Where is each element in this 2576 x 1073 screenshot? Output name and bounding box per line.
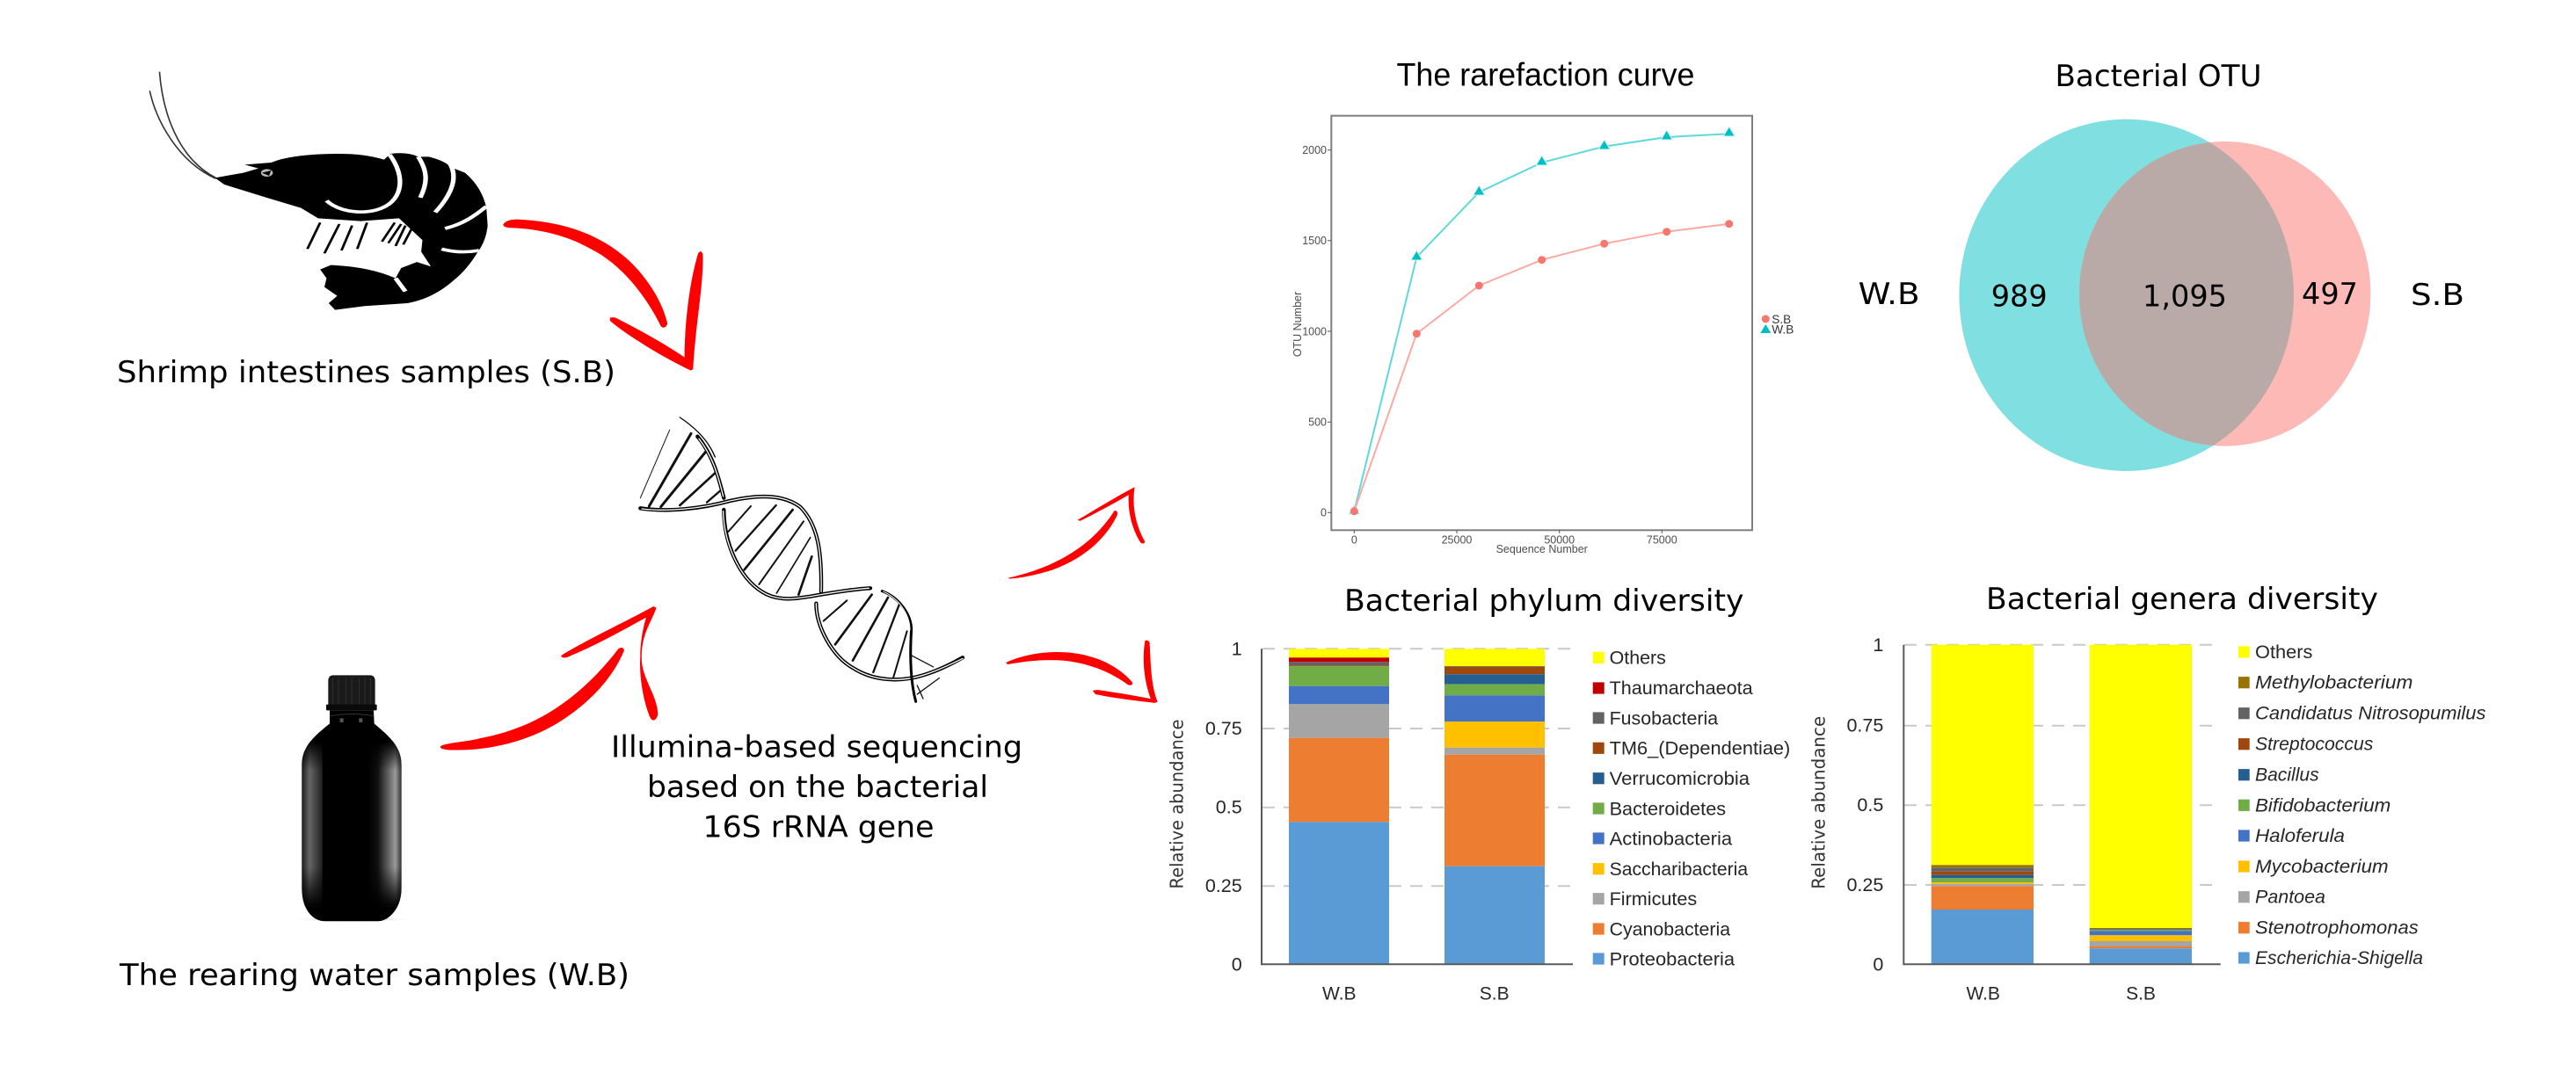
- legend: phylum: TM6_(Dependentiae): [1610, 739, 1790, 759]
- text: sequencing description: [611, 730, 1022, 845]
- heading: bacterial OTU: Bacterial OTU: [2056, 59, 2261, 94]
- legend: phylum: Bacteroidetes: [1610, 799, 1726, 819]
- legend: phylum: [1593, 649, 1790, 969]
- venn diagram: 989: [1991, 279, 2048, 313]
- stacked bar chart: phylum: 0.25: [1205, 875, 1242, 896]
- text: sequencing description: 16S rRNA gene: [703, 810, 934, 845]
- plot frame and axes: [1292, 116, 1752, 555]
- legend: genera: Bifidobacterium: [2255, 795, 2390, 816]
- stacked bar chart: genera: 0.5: [1857, 794, 1883, 816]
- label: water samples: The rearing water samples (W.B): [119, 958, 629, 993]
- legend: phylum: Thaumarchaeota: [1610, 678, 1753, 699]
- legend: genera: Haloferula: [2255, 826, 2345, 846]
- legend: rarefaction series: [1760, 312, 1794, 336]
- plot frame and axes: 1000: [1302, 325, 1327, 337]
- plot frame and axes: 1500: [1302, 235, 1327, 247]
- stacked bar chart: genera: 0.25: [1846, 874, 1883, 895]
- plot frame and axes: 500: [1308, 417, 1327, 429]
- legend: genera: Others: [2255, 642, 2312, 663]
- legend: phylum: Cyanobacteria: [1610, 919, 1730, 939]
- text: sequencing description: Illumina-based sequencing: [611, 730, 1022, 765]
- plot frame and axes: 2000: [1302, 144, 1327, 156]
- plot frame and axes: 25000: [1442, 533, 1472, 546]
- icon: water bottle: [302, 675, 402, 921]
- stacked bar chart: phylum: 0.5: [1216, 797, 1242, 818]
- arrow: water to sequencing: [440, 606, 658, 750]
- line series: S.B: [1350, 220, 1733, 515]
- label: shrimp samples: Shrimp intestines samples (S.B): [117, 355, 615, 390]
- legend: phylum: Saccharibacteria: [1610, 859, 1748, 880]
- stacked bar chart: phylum: Relative abundance: [1167, 719, 1188, 889]
- plot frame and axes: OTU Number: [1292, 292, 1304, 357]
- stacked bar chart: phylum: 0: [1232, 953, 1242, 975]
- plot frame and axes: 50000: [1544, 533, 1575, 546]
- stacked bar chart: phylum: S.B: [1480, 983, 1510, 1004]
- heading: genera diversity: Bacterial genera diversity: [1986, 582, 2378, 617]
- legend: phylum: Proteobacteria: [1610, 949, 1735, 969]
- legend: genera: Streptococcus: [2255, 735, 2374, 755]
- legend: rarefaction series: S.B: [1772, 312, 1791, 326]
- legend: genera: Pantoea: [2255, 888, 2325, 908]
- label: W.B set: W.B: [1859, 277, 1920, 312]
- legend: genera: Escherichia-Shigella: [2255, 948, 2423, 968]
- panel: rarefaction curve: [1292, 56, 1794, 555]
- arrow: shrimp to sequencing: [503, 220, 702, 371]
- heading: rarefaction curve: The rarefaction curve: [1396, 56, 1695, 92]
- stacked bar chart: genera: 0: [1873, 953, 1883, 975]
- stacked bar chart: genera: W.B: [1966, 983, 2000, 1004]
- line series: W.B: [1349, 127, 1735, 514]
- arrow: sequencing to diversity charts: [1006, 641, 1158, 703]
- legend: genera: Stenotrophomonas: [2255, 918, 2419, 939]
- panel: bacterial phylum diversity: [1167, 584, 1790, 1004]
- stacked bar chart: genera: Relative abundance: [1808, 716, 1830, 889]
- legend: genera: Bacillus: [2255, 765, 2319, 786]
- legend: phylum: Fusobacteria: [1610, 708, 1718, 729]
- legend: genera: Methylobacterium: [2255, 673, 2412, 693]
- legend: genera: Mycobacterium: [2255, 857, 2389, 877]
- stacked bar chart: phylum: [1167, 639, 1573, 1004]
- stacked bar chart: genera: [1808, 634, 2221, 1004]
- panel: bacterial genera diversity: [1808, 582, 2486, 1004]
- legend: phylum: Firmicutes: [1610, 889, 1697, 910]
- stacked bar chart: genera: S.B: [2126, 983, 2156, 1004]
- plot frame and axes: Sequence Number: [1496, 543, 1588, 555]
- stacked bar chart: genera: 0.75: [1846, 715, 1883, 736]
- legend: genera: Candidatus Nitrosopumilus: [2255, 704, 2486, 724]
- legend: genera: [2238, 642, 2486, 968]
- legend: phylum: Actinobacteria: [1610, 829, 1732, 849]
- plot frame and axes: 75000: [1647, 533, 1677, 546]
- stacked bar chart: phylum: 1: [1232, 639, 1242, 660]
- venn diagram: 1,095: [2143, 279, 2227, 313]
- icon: DNA double helix: [640, 417, 963, 701]
- text: sequencing description: based on the bacterial: [647, 770, 988, 805]
- legend: phylum: Others: [1610, 649, 1666, 669]
- legend: rarefaction series: W.B: [1772, 322, 1794, 336]
- panel: bacterial OTU venn: [1859, 59, 2464, 471]
- plot frame and axes: 0: [1351, 533, 1357, 546]
- stacked bar chart: phylum: 0.75: [1205, 718, 1242, 739]
- icon: shrimp: [149, 72, 488, 310]
- heading: phylum diversity: Bacterial phylum diversity: [1344, 584, 1744, 619]
- stacked bar chart: phylum: W.B: [1322, 983, 1357, 1004]
- label: S.B set: S.B: [2411, 278, 2464, 313]
- venn diagram: [1959, 120, 2370, 471]
- stacked bar chart: genera: 1: [1873, 634, 1883, 656]
- plot frame and axes: 0: [1321, 506, 1327, 518]
- legend: phylum: Verrucomicrobia: [1610, 769, 1750, 789]
- venn diagram: 497: [2302, 277, 2358, 311]
- arrow: sequencing to rarefaction and OTU: [1008, 487, 1145, 578]
